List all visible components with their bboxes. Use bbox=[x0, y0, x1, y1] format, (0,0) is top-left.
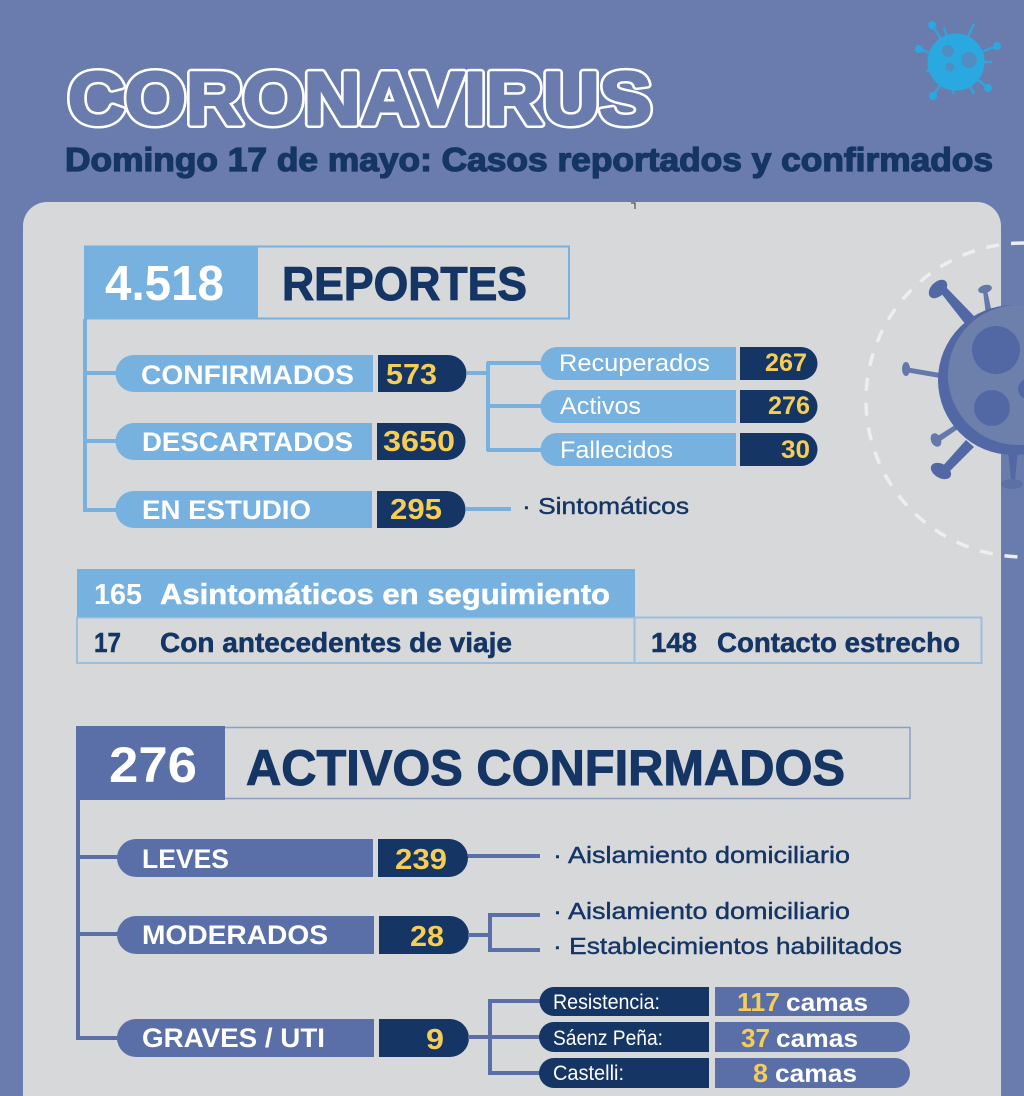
row: resistencia: 117 bbox=[737, 987, 780, 1017]
connector: confirmados breakdown bbox=[467, 362, 541, 451]
connector: moderados bbox=[468, 915, 540, 951]
total reportes: 4.518 bbox=[105, 257, 224, 311]
row: confirmados: CONFIRMADOS bbox=[141, 360, 354, 390]
row: saenz pena: camas bbox=[776, 1025, 858, 1053]
row: saenz pena: Sáenz Peña: bbox=[553, 1027, 663, 1050]
row: resistencia: camas bbox=[786, 989, 868, 1017]
row: castelli: Castelli: bbox=[553, 1062, 624, 1085]
total activos: 276 bbox=[109, 737, 197, 793]
title: CORONAVIRUS bbox=[68, 57, 652, 140]
icon: large virus with dashed ring bbox=[866, 243, 1024, 557]
label: aislamiento leves: · Aislamiento domiciliario bbox=[553, 842, 850, 868]
row: moderados: 28 bbox=[410, 921, 444, 953]
row: castelli: 8 bbox=[753, 1058, 768, 1088]
row: leves bbox=[117, 839, 468, 877]
row: graves uti: GRAVES / UTI bbox=[142, 1023, 325, 1053]
row: moderados: MODERADOS bbox=[142, 920, 328, 950]
row: en estudio bbox=[116, 491, 466, 528]
row: recuperados: 267 bbox=[765, 349, 807, 377]
row: asintomaticos: 165 bbox=[94, 579, 142, 611]
icon: small virus bbox=[916, 22, 1000, 100]
row: fallecidos: 30 bbox=[781, 436, 810, 464]
label: sintomaticos: · Sintomáticos bbox=[522, 493, 689, 519]
row: contacto estrecho: 148 bbox=[651, 627, 697, 658]
row: asintomaticos: Asintomáticos en seguimiento bbox=[160, 579, 610, 611]
row: antecedentes de viaje: Con antecedentes de viaje bbox=[160, 627, 512, 658]
total activos bbox=[76, 726, 225, 800]
panel: reportes bbox=[85, 246, 818, 528]
row: castelli bbox=[539, 1058, 910, 1088]
row: resistencia: Resistencia: bbox=[553, 991, 660, 1014]
heading: activos confirmados: ACTIVOS CONFIRMADOS bbox=[246, 740, 845, 796]
row: confirmados bbox=[116, 355, 466, 392]
subtitle: Domingo 17 de mayo: Casos reportados y confirmados bbox=[65, 141, 993, 178]
connector: leves bbox=[468, 854, 540, 858]
row: activos: 276 bbox=[768, 392, 810, 420]
connector: en estudio bbox=[466, 507, 511, 511]
tree connector bbox=[78, 800, 118, 1038]
row: asintomaticos bbox=[77, 569, 635, 617]
row: graves uti: 9 bbox=[426, 1024, 444, 1056]
row: leves: 239 bbox=[395, 844, 447, 876]
row: activos: Activos bbox=[560, 393, 641, 420]
row: saenz pena bbox=[539, 1022, 910, 1053]
panel: sintomaticos table bbox=[77, 569, 982, 663]
tree connector bbox=[85, 319, 116, 510]
row: descartados: DESCARTADOS bbox=[142, 427, 353, 457]
heading: reportes: REPORTES bbox=[282, 257, 527, 310]
label: aislamiento moderados: · Aislamiento domiciliario bbox=[553, 898, 850, 924]
row: recuperados: Recuperados bbox=[559, 350, 710, 377]
row: confirmados: 573 bbox=[386, 359, 437, 391]
label: establecimientos: · Establecimientos habilitados bbox=[553, 933, 902, 959]
row: castelli: camas bbox=[775, 1060, 857, 1088]
title: CORONAVIRUS bbox=[68, 57, 652, 140]
row: fallecidos bbox=[540, 433, 818, 466]
row: en estudio: EN ESTUDIO bbox=[142, 495, 311, 525]
row: saenz pena: 37 bbox=[741, 1023, 770, 1053]
row: en estudio: 295 bbox=[390, 494, 442, 526]
row: descartados: 3650 bbox=[383, 426, 455, 458]
total reportes bbox=[85, 246, 258, 319]
row: moderados bbox=[117, 916, 469, 954]
row: descartados bbox=[116, 423, 466, 460]
row: contacto estrecho: Contacto estrecho bbox=[717, 627, 960, 658]
panel: activos confirmados bbox=[76, 726, 910, 1088]
row: fallecidos: Fallecidos bbox=[560, 437, 673, 464]
row: recuperados bbox=[540, 347, 818, 380]
row: graves uti bbox=[117, 1019, 469, 1057]
row: leves: LEVES bbox=[142, 844, 229, 874]
icon: small tick mark bbox=[631, 203, 635, 209]
row: antecedentes de viaje: 17 bbox=[94, 627, 121, 658]
row: activos bbox=[540, 390, 818, 423]
connector: graves bbox=[468, 1001, 540, 1074]
row: resistencia bbox=[540, 987, 910, 1017]
panel: background card bbox=[23, 202, 1001, 1096]
